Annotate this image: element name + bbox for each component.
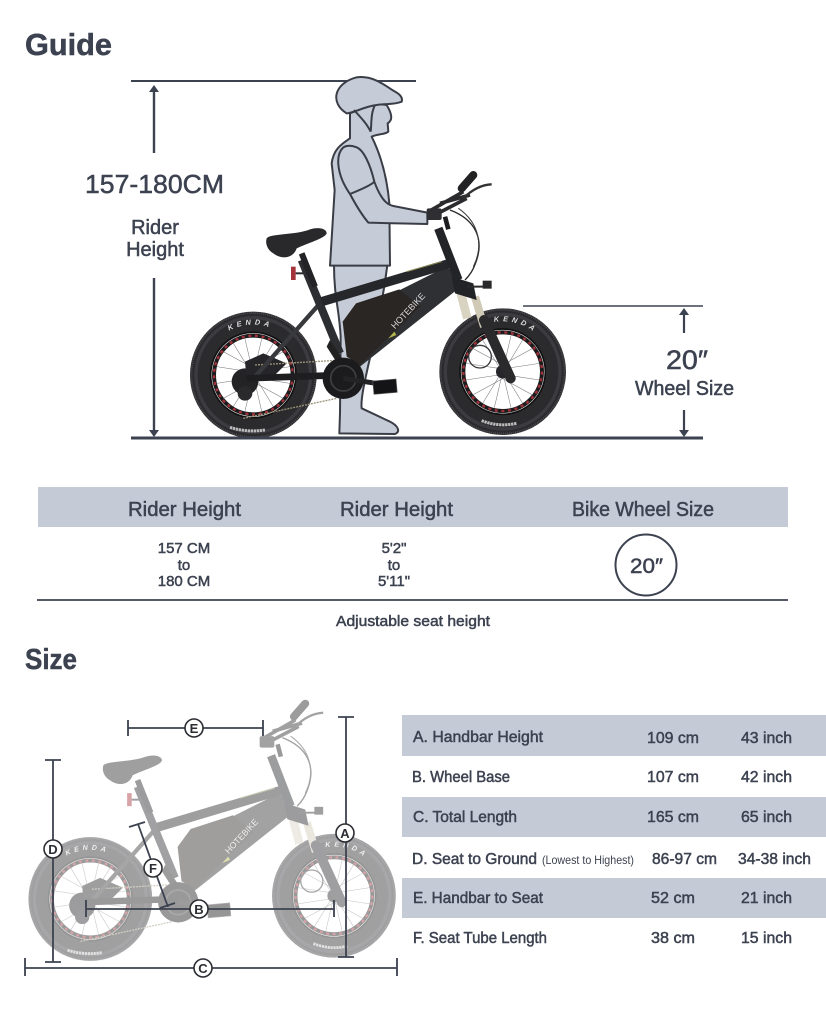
header: rider height feet: Rider Height bbox=[340, 499, 453, 521]
row C: 165 cm bbox=[647, 809, 699, 826]
bike photo: KENDA bbox=[228, 320, 269, 331]
cell: height in cm: 157 CM bbox=[158, 540, 210, 557]
marker B bbox=[86, 900, 334, 918]
cell: height in cm: 180 CM bbox=[158, 573, 210, 590]
row E: 21 inch bbox=[741, 890, 792, 907]
cell: height in feet bbox=[378, 540, 410, 590]
bike photo: KENDA bbox=[494, 316, 534, 331]
cell: height in feet: 5'11" bbox=[378, 573, 410, 590]
row E: 52 cm bbox=[651, 890, 695, 907]
cell: height in cm: to bbox=[178, 557, 190, 574]
row A: A. Handbar Height bbox=[413, 729, 544, 746]
rider height dimension bbox=[85, 81, 416, 437]
row D: D. Seat to Ground bbox=[412, 851, 537, 868]
marker C bbox=[25, 958, 397, 977]
row C: 65 inch bbox=[741, 809, 792, 826]
row F bbox=[413, 930, 792, 947]
marker A: A bbox=[340, 826, 350, 841]
row A bbox=[413, 729, 792, 747]
rider height dimension: Rider bbox=[131, 217, 179, 239]
header: rider height cm: Rider Height bbox=[128, 499, 241, 521]
row B: B. Wheel Base bbox=[412, 769, 510, 786]
wheel size dimension: 20″ bbox=[666, 345, 708, 375]
row E bbox=[413, 890, 792, 907]
marker D: D bbox=[48, 842, 58, 857]
table: rider height and wheel size bbox=[37, 487, 788, 600]
row D: (Lowest to Highest) bbox=[542, 853, 634, 867]
faded bike diagram bbox=[30, 704, 394, 960]
table: size measurements bbox=[402, 715, 826, 947]
ground line bbox=[131, 436, 703, 440]
dimension markers bbox=[25, 717, 397, 977]
marker D bbox=[44, 760, 62, 962]
marker F: F bbox=[149, 861, 157, 876]
row D: 34-38 inch bbox=[738, 851, 811, 868]
marker C: C bbox=[198, 961, 208, 976]
table header band bbox=[38, 487, 788, 527]
marker B: B bbox=[194, 902, 204, 917]
marker A bbox=[336, 717, 354, 957]
row A: 43 inch bbox=[741, 730, 792, 747]
row B bbox=[412, 769, 792, 786]
row F: 15 inch bbox=[741, 930, 792, 947]
row F: 38 cm bbox=[651, 930, 695, 947]
row F: F. Seat Tube Length bbox=[413, 930, 547, 947]
bike photo: HOTEBIKE bbox=[389, 291, 427, 331]
rider silhouette bbox=[330, 77, 427, 434]
row D: 86-97 cm bbox=[652, 851, 717, 868]
wheel size dimension: Wheel Size bbox=[635, 378, 734, 400]
row B: 42 inch bbox=[741, 769, 792, 786]
title: Guide: Guide bbox=[25, 27, 112, 62]
row bands bbox=[402, 715, 826, 918]
wheel size dimension bbox=[523, 306, 734, 437]
row C: C. Total Length bbox=[413, 809, 517, 826]
cell: wheel size badge: 20″ bbox=[630, 555, 664, 578]
marker E: E bbox=[190, 721, 199, 736]
cell: height in feet: 5'2" bbox=[382, 540, 406, 557]
row E: E. Handbar to Seat bbox=[413, 890, 544, 907]
header: bike wheel size: Bike Wheel Size bbox=[572, 499, 714, 521]
rider height dimension: Height bbox=[126, 239, 184, 261]
bike photo bbox=[190, 171, 566, 436]
rear wheel bbox=[191, 313, 315, 437]
cell: wheel size badge bbox=[616, 534, 676, 596]
row B: 107 cm bbox=[647, 769, 699, 786]
note: adjustable seat height: Adjustable seat height bbox=[336, 613, 491, 630]
cell: height in cm bbox=[158, 540, 210, 590]
marker E bbox=[128, 719, 263, 737]
row D bbox=[412, 851, 811, 868]
front wheel bbox=[441, 310, 565, 434]
title: Size: Size bbox=[25, 644, 77, 676]
row A: 109 cm bbox=[647, 730, 699, 747]
row C bbox=[413, 809, 792, 826]
rider height dimension: 157-180CM bbox=[85, 169, 224, 199]
marker F bbox=[129, 822, 175, 908]
cell: height in feet: to bbox=[388, 557, 400, 574]
